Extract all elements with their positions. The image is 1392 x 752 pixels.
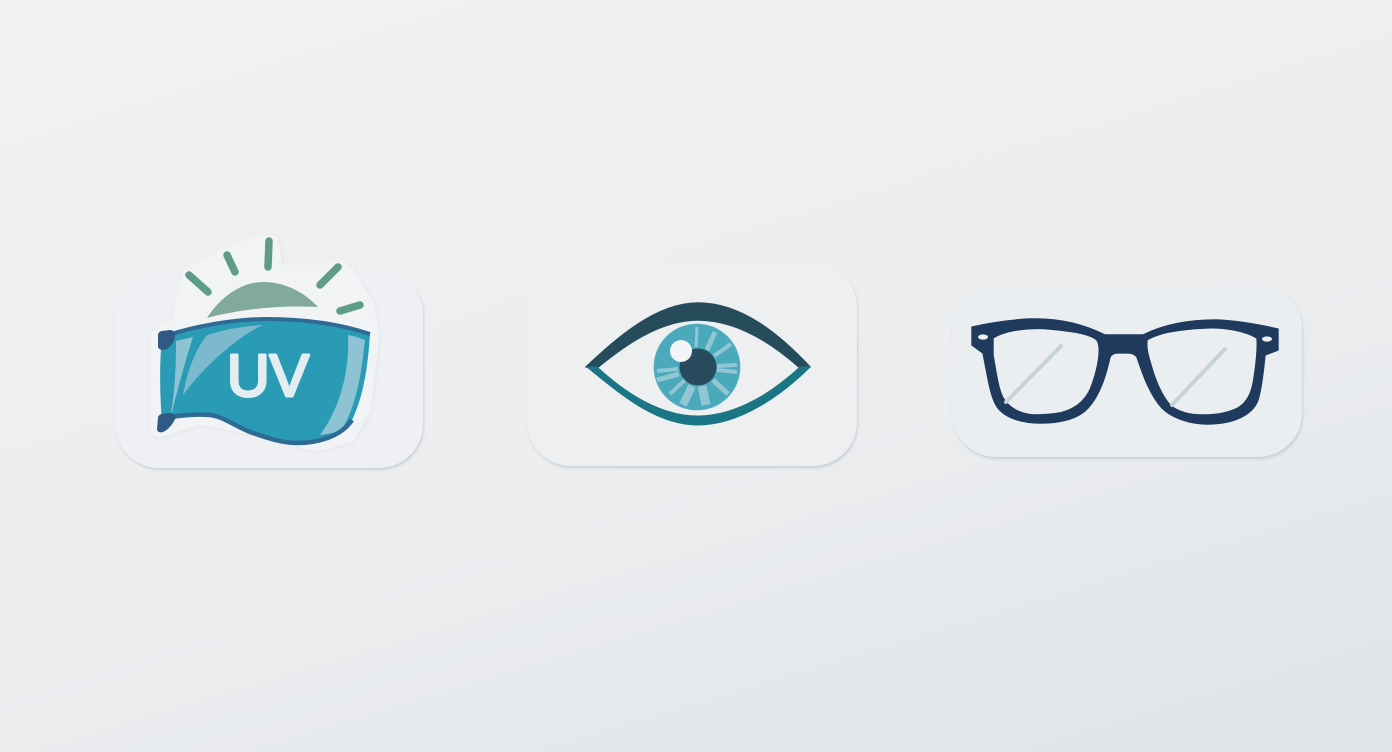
lower eyelid: [587, 367, 810, 425]
sticker outline: [155, 238, 375, 447]
frame top edge: [165, 319, 370, 336]
panel: UV protection: [115, 238, 423, 468]
lens shine right: [320, 335, 365, 435]
pupil: [680, 348, 716, 386]
frame hinge top: [158, 330, 175, 350]
frame hinge bottom: [157, 413, 175, 432]
iris: [654, 324, 740, 410]
lens fill: [160, 319, 370, 443]
lens shine left: [171, 337, 193, 413]
lens glare right: [1172, 349, 1225, 405]
card: UV: [115, 271, 423, 468]
frame: [972, 319, 1278, 424]
hinge rivet right: [1262, 336, 1272, 342]
icon: glasses: [972, 319, 1278, 424]
icon: UV lens banner: [157, 319, 370, 443]
icon: sun: [207, 282, 318, 318]
frame bottom edge: [170, 415, 352, 443]
card: eye: [527, 263, 857, 466]
iris rays: [657, 327, 737, 405]
lens shine swoosh: [183, 325, 263, 395]
icon: sun rays: [189, 241, 360, 311]
hinge rivet left: [978, 334, 988, 340]
lens glare left: [1006, 346, 1061, 402]
icon: eye: [586, 303, 810, 425]
card: glasses: [952, 285, 1302, 457]
text: UV: UV: [227, 343, 310, 409]
panel: glasses: [952, 285, 1302, 457]
upper eyelid: [586, 303, 810, 368]
panel: eye: [527, 263, 857, 466]
highlight: [670, 340, 692, 362]
